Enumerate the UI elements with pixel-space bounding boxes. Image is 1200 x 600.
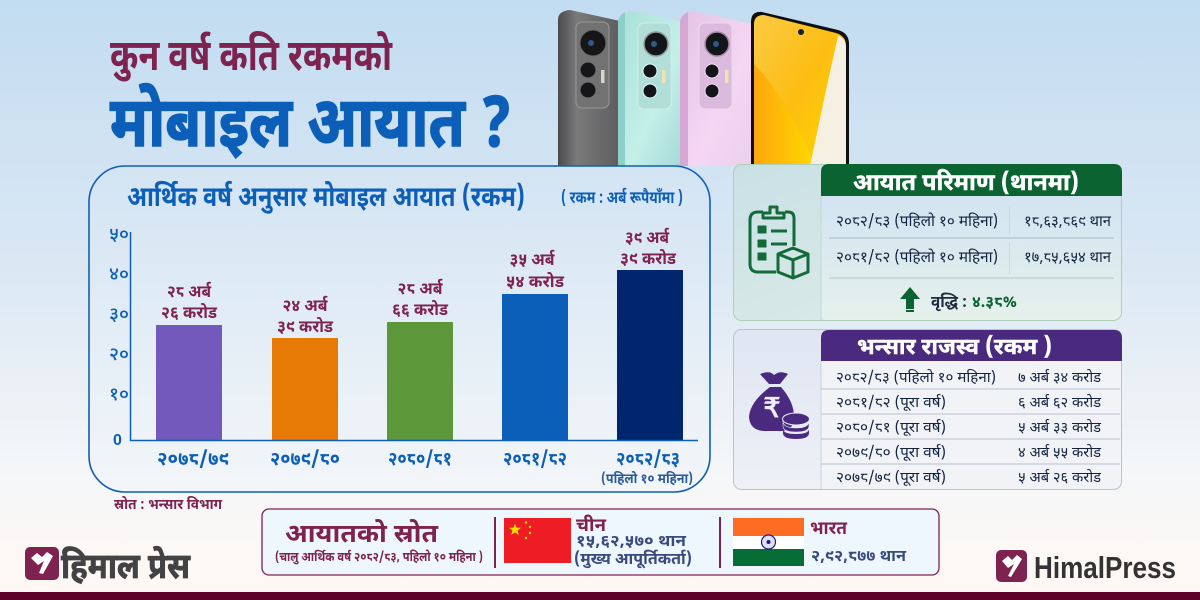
- table rows: [836, 369, 1101, 488]
- panel: bar chart: [89, 166, 710, 492]
- logo: Himal Press Nepali: हिमाल प्रेस: [61, 546, 191, 593]
- icon: money bag: ₹: [763, 393, 781, 423]
- table rows: २०७८/७९ (पूरा वर्ष): [836, 469, 946, 488]
- x axis labels: २०७८/७९: [157, 448, 229, 473]
- table rows: ४ अर्ब ५५ करोड: [1018, 444, 1101, 463]
- bar value labels: ३९ अर्ब: [625, 227, 670, 250]
- y axis: १०: [109, 385, 129, 408]
- icon: clipboard and box: [750, 207, 808, 278]
- bar value labels: ६६ करोड: [392, 299, 448, 322]
- header: [821, 330, 1122, 363]
- bar value labels: [161, 227, 676, 339]
- source heading: आयातको स्रोत: [285, 519, 439, 553]
- x axis labels: २०८०/८१: [388, 448, 452, 473]
- growth text: [931, 293, 1017, 314]
- logo: HimalPress English: HimalPress: [1034, 550, 1176, 585]
- phone: front screen: [751, 12, 849, 166]
- y axis: 0: [113, 432, 122, 449]
- China text: [574, 515, 692, 571]
- bar value labels: ३९ करोड: [277, 316, 333, 339]
- flag: China: [504, 518, 571, 563]
- phones image: [558, 10, 849, 166]
- y axis: २०: [109, 345, 129, 368]
- table rows: २०७९/८० (पूरा वर्ष): [836, 444, 946, 463]
- x axis labels: २०८१/८२: [503, 448, 567, 473]
- table rows: ५ अर्ब २६ करोड: [1018, 469, 1101, 488]
- table rows: १७,८५,६५४ थान: [1024, 250, 1112, 269]
- phone: mint: [618, 11, 682, 166]
- title: कुन वर्ष कति रकमको: [110, 31, 393, 88]
- bars: [130, 270, 698, 440]
- table rows: ५ अर्ब ३३ करोड: [1018, 419, 1101, 438]
- panel: import quantity: [734, 164, 1122, 321]
- panel: bar chart: (पहिलो १० महिना): [601, 470, 693, 489]
- y axis: ४०: [109, 265, 129, 288]
- icon: up arrow: [900, 287, 920, 312]
- chart title: आर्थिक वर्ष अनुसार मोबाइल आयात (रकम): [127, 180, 525, 218]
- table rows: २०८०/८१ (पूरा वर्ष): [836, 419, 946, 438]
- growth text: वृद्धि :: [931, 293, 967, 314]
- header: आयात परिमाण (थानमा): [853, 170, 1079, 200]
- icon: money bag: [749, 372, 810, 439]
- bar value labels: ५४ करोड: [506, 271, 564, 294]
- y axis: [109, 225, 130, 449]
- logo: HimalPress English: [996, 550, 1176, 585]
- table rows: ६ अर्ब ६२ करोड: [1018, 394, 1101, 413]
- bar value labels: २४ अर्ब: [282, 295, 328, 318]
- y axis: ३०: [109, 305, 129, 328]
- x axis labels: [157, 448, 680, 473]
- source note: स्रोत : भन्सार विभाग: [114, 496, 222, 515]
- India text: २,९२,८७७ थान: [811, 547, 907, 568]
- title: मोबाइल आयात ?: [110, 83, 512, 175]
- bottom bar: [0, 592, 1200, 600]
- source subheading: (चालु आर्थिक वर्ष २०८२/८३, पहिलो १० महिना ): [275, 549, 483, 567]
- y axis: ५०: [109, 225, 129, 248]
- chart unit note: ( रकम : अर्ब रूपैयाँमा ): [561, 186, 683, 210]
- panel: import source: [262, 509, 939, 575]
- table rows: [836, 213, 1112, 269]
- header: [821, 164, 1122, 200]
- India text: [810, 519, 907, 568]
- China text: १५,६२,५७० थान: [576, 532, 687, 553]
- table rows: २०८१/८२ (पहिलो १० महिना): [836, 249, 998, 269]
- growth text: ४.३८%: [972, 293, 1017, 314]
- title: [110, 31, 512, 175]
- header: भन्सार राजस्व (रकम ): [857, 334, 1052, 363]
- bar value labels: २८ अर्ब: [167, 281, 212, 304]
- table rows: २०८२/८३ (पहिलो १० महिना): [836, 213, 998, 233]
- India text: भारत: [810, 519, 848, 542]
- panel: customs revenue: [734, 330, 1122, 490]
- China text: चीन: [576, 515, 607, 539]
- China text: (मुख्य आपूर्तिकर्ता): [574, 549, 692, 571]
- phone: pink: [680, 11, 752, 166]
- table rows: २०८२/८३ (पहिलो १० महिना): [836, 369, 996, 388]
- table rows: ७ अर्ब ३४ करोड: [1018, 369, 1101, 388]
- bar value labels: २६ करोड: [161, 302, 217, 325]
- logo: Himal Press Nepali: [25, 546, 191, 593]
- bar value labels: ३५ अर्ब: [510, 249, 555, 272]
- phone: grey: [558, 10, 620, 166]
- x axis labels: २०८२/८३: [616, 448, 680, 473]
- bar value labels: ३९ करोड: [620, 248, 676, 271]
- table rows: २०८१/८२ (पूरा वर्ष): [836, 394, 946, 413]
- table rows: १८,६३,८६९ थान: [1024, 214, 1112, 233]
- x axis labels: २०७९/८०: [270, 448, 340, 473]
- flag: India: [733, 518, 804, 566]
- bar value labels: २८ अर्ब: [398, 278, 443, 301]
